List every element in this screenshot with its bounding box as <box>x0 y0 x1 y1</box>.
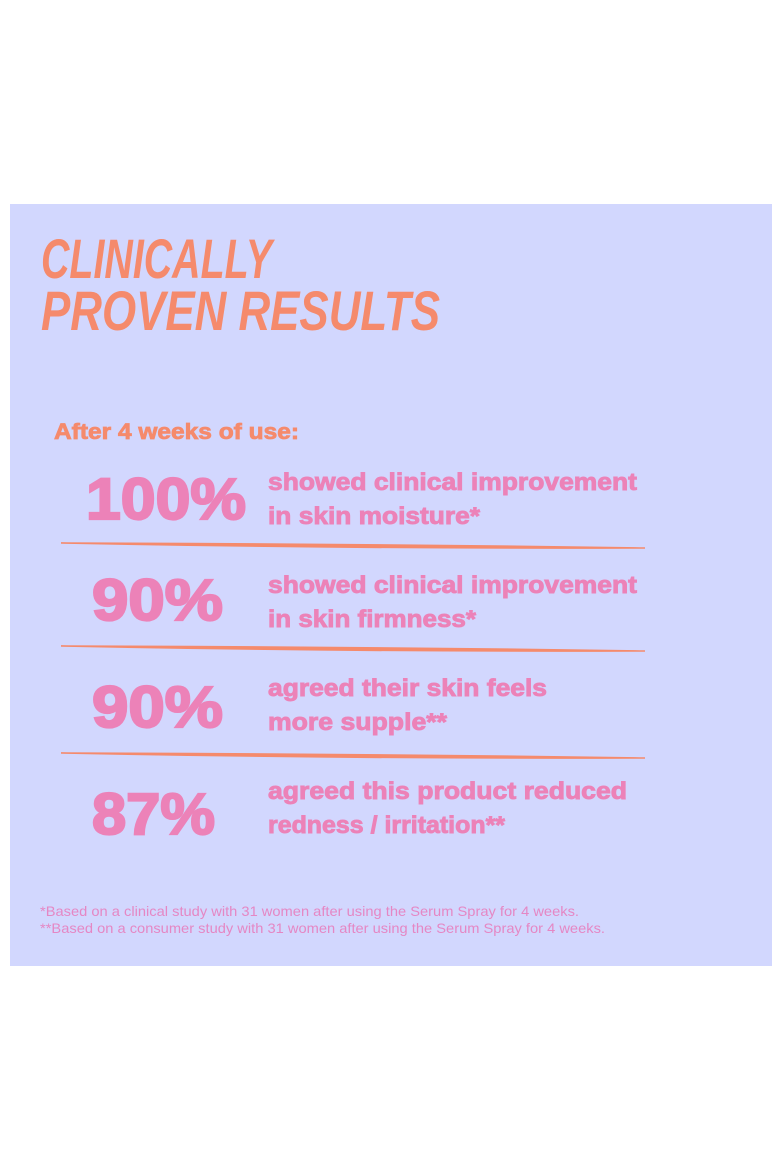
stat: 90% skin firmness <box>92 568 637 633</box>
footnotes: **Based on a consumer study with 31 women after using the Serum Spray for 4 weeks. <box>40 920 605 936</box>
stat: 90% more supple: more supple** <box>268 709 448 736</box>
stat: 87% redness irritation: 87% <box>92 782 215 847</box>
divider 2 <box>61 646 645 651</box>
stat: 100% skin moisture: 100% <box>86 467 246 532</box>
stat: 90% skin firmness: 90% <box>92 568 223 633</box>
stat: 90% more supple: 90% <box>92 675 223 740</box>
stat: 87% redness irritation: redness / irritation** <box>268 812 506 839</box>
stat: 87% redness irritation <box>92 778 627 847</box>
footnotes: *Based on a clinical study with 31 women after using the Serum Spray for 4 weeks. <box>40 903 579 919</box>
divider 3 <box>61 753 645 758</box>
footnotes <box>40 903 605 936</box>
panel: background <box>10 204 772 966</box>
stat: 87% redness irritation: agreed this product reduced <box>268 778 627 805</box>
title: CLINICALLY <box>41 227 275 290</box>
subheading: After 4 weeks of use: <box>54 419 299 444</box>
stat: 100% skin moisture: showed clinical improvement <box>268 469 637 496</box>
stat: 90% skin firmness: showed clinical improvement <box>268 572 637 599</box>
stat: 90% more supple <box>92 675 547 740</box>
divider 1 <box>61 543 645 548</box>
stat: 90% more supple: agreed their skin feels <box>268 675 547 702</box>
stat: 100% skin moisture <box>86 467 637 532</box>
title: PROVEN RESULTS <box>41 279 440 342</box>
stat: 90% skin firmness: in skin firmness* <box>268 606 477 633</box>
stat: 100% skin moisture: in skin moisture* <box>268 503 481 530</box>
title <box>41 227 440 342</box>
